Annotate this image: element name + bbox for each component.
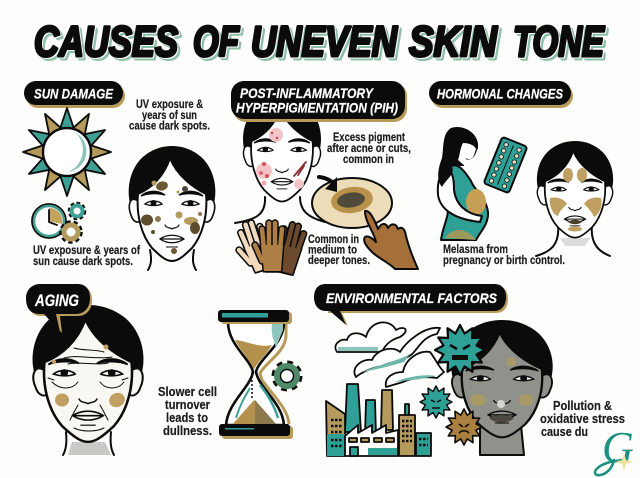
icon: large teal pollutant (435, 325, 485, 375)
title: CAUSES (34, 18, 178, 66)
panel: post-inflammatory hyperpigmentation (231, 81, 418, 275)
text: excess pigment: after acne or cuts, (327, 141, 411, 155)
text: UV exposure caption bottom: sun cause dark spots. (33, 254, 133, 268)
text: excess pigment (327, 130, 411, 166)
icon: diverse hands (232, 220, 306, 275)
heading: environmental factors (314, 284, 508, 326)
text: UV exposure caption top: years of sun (142, 108, 197, 122)
heading: post-inflammatory hyperpigmentation: HYPERPIGMENTATION (PIH) (236, 100, 398, 116)
panel: hormonal changes (429, 81, 613, 267)
illustration: factory (326, 384, 431, 456)
text: melasma: pregnancy or birth control. (443, 253, 565, 267)
text: common in medium to deeper tones: Common in (308, 232, 359, 246)
title: TONE (513, 18, 605, 66)
icon: pointing hand (364, 211, 418, 269)
text: UV exposure caption top: cause dark spots. (129, 118, 210, 132)
heading: sun damage: SUN DAMAGE (34, 86, 114, 102)
icon: small teal pollutant (420, 386, 452, 418)
heading: sun damage (24, 81, 125, 108)
heading: aging: AGING (34, 291, 79, 310)
heading: environmental factors: ENVIRONMENTAL FACTORS (326, 290, 498, 306)
icon: tan pollutant (446, 409, 482, 445)
icon: sun (23, 108, 111, 196)
text: pollution and oxidative stress: cause du (541, 424, 588, 439)
heading: post-inflammatory hyperpigmentation: POST-INFLAMMATORY (240, 85, 374, 101)
text: common in medium to deeper tones (308, 232, 370, 267)
icon: hourglass (218, 310, 293, 439)
icon: birth control pill pack (484, 137, 527, 193)
icon: gear (275, 364, 299, 388)
logo: G with sparkle: G (602, 423, 634, 472)
text: UV exposure caption bottom (33, 243, 141, 268)
heading: hormonal changes: HORMONAL CHANGES (437, 86, 564, 102)
icon: pigment spot close-up (312, 178, 392, 228)
illustration: pregnant woman (438, 127, 488, 240)
illustration: polluted face (451, 320, 553, 455)
title: SKIN (409, 18, 498, 66)
title: UNEVEN (251, 18, 398, 66)
text: slower cell turnover: dullness. (163, 423, 212, 438)
text: UV exposure caption top: UV exposure & (136, 97, 203, 111)
text: excess pigment: common in (343, 152, 394, 166)
heading: post-inflammatory hyperpigmentation (231, 81, 407, 122)
illustration: aged face (33, 305, 143, 455)
text: pollution and oxidative stress: Pollution & (553, 398, 612, 413)
heading: aging (26, 284, 92, 333)
title (34, 18, 605, 66)
text: slower cell turnover: leads to (166, 410, 208, 425)
panel: sun damage (23, 81, 215, 270)
panel: aging (26, 284, 299, 455)
text: pollution and oxidative stress: oxidative stress (540, 411, 625, 426)
heading: hormonal changes (429, 81, 573, 108)
title: OF (193, 18, 240, 66)
text: common in medium to deeper tones: deeper tones. (308, 253, 370, 267)
icon: clock and gears (32, 204, 84, 240)
text: UV exposure caption top (129, 97, 210, 132)
text: pollution and oxidative stress (540, 398, 625, 439)
illustration: face with melasma (536, 141, 613, 256)
text: slower cell turnover: turnover (165, 397, 210, 412)
text: slower cell turnover: Slower cell (158, 384, 217, 399)
text: slower cell turnover (158, 384, 217, 438)
illustration: face with acne (235, 98, 325, 223)
illustration: face with dark spots (129, 146, 215, 270)
text: UV exposure caption bottom: UV exposure & years of (33, 243, 141, 257)
panel: environmental factors (314, 284, 625, 456)
arrow: curved pointer (319, 177, 337, 192)
text: melasma (443, 242, 565, 267)
text: melasma: Melasma from (443, 242, 508, 256)
text: excess pigment: Excess pigment (333, 130, 405, 144)
text: common in medium to deeper tones: medium to (308, 242, 357, 256)
illustration: smoke clouds (335, 322, 444, 387)
